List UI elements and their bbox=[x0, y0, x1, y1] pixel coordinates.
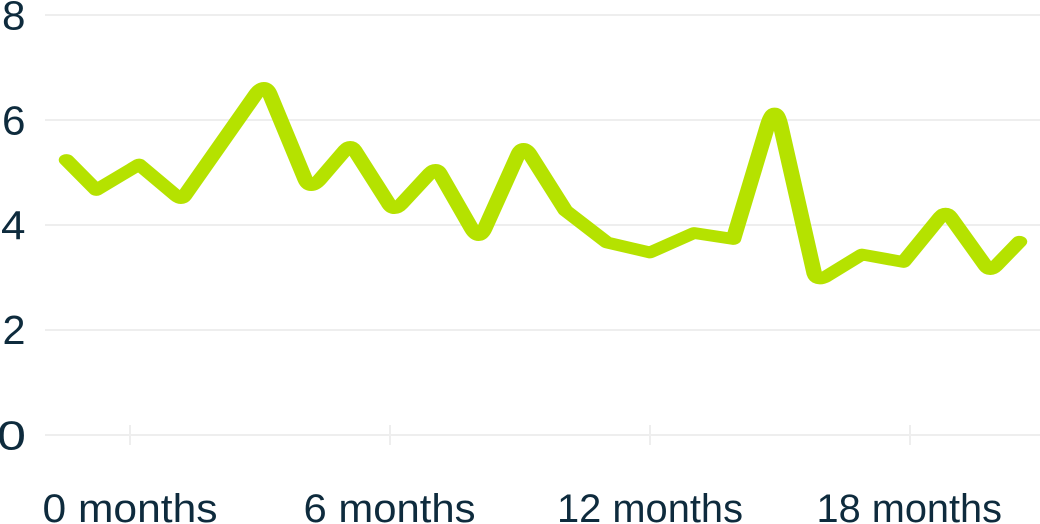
y axis labels bbox=[0, 0, 26, 458]
y axis labels: 2 bbox=[2, 307, 25, 353]
y axis labels: 4 bbox=[1, 202, 26, 248]
y axis labels: 6 bbox=[2, 98, 25, 144]
data line bbox=[67, 88, 1019, 278]
y axis gridlines and x axis ticks bbox=[45, 15, 1040, 445]
x axis labels bbox=[42, 487, 1002, 524]
